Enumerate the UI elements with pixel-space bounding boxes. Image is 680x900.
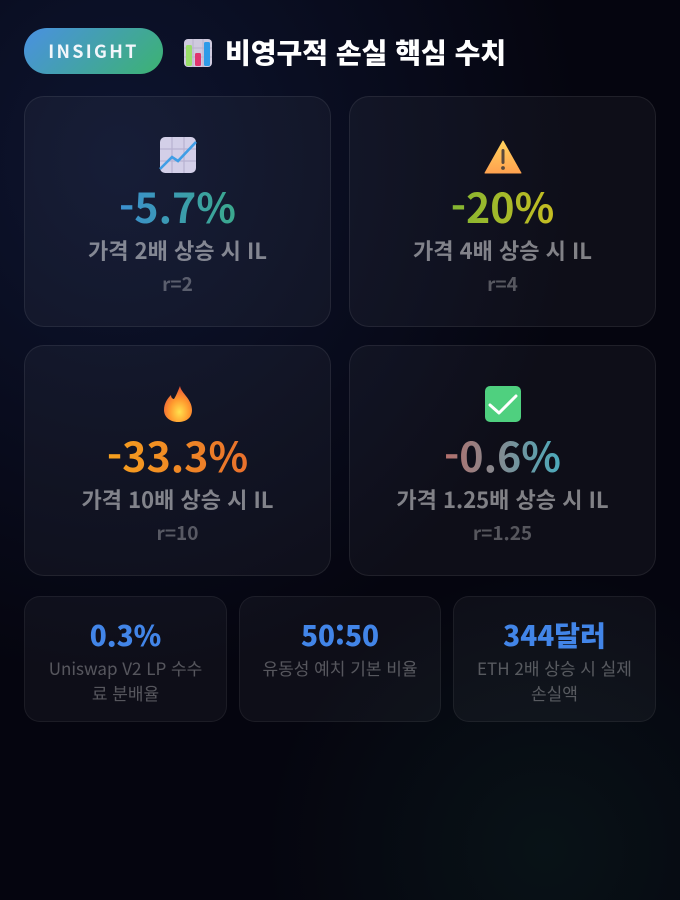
ratio: r=10: [157, 519, 198, 546]
label: 가격 1.25배 상승 시 IL: [396, 483, 609, 515]
stat: loss amount: [453, 596, 656, 722]
icon: chart increasing: [159, 137, 197, 173]
badge: INSIGHT: [24, 28, 163, 74]
stat label: 유동성 예치 기본 비율: [262, 655, 418, 680]
value: -20%: [451, 175, 554, 235]
ratio: r=1.25: [473, 519, 532, 546]
icon: fire: [164, 386, 192, 422]
stat: fee share: [24, 596, 227, 722]
stat label: Uniswap V2 LP 수수료 분배율: [49, 655, 202, 705]
icon: check mark: [485, 386, 521, 422]
icon: warning: [484, 140, 522, 174]
panel: r=2: [24, 96, 331, 327]
value: -0.6%: [444, 424, 561, 484]
stat label: ETH 2배 상승 시 실제 손실액: [477, 655, 632, 705]
label: 가격 4배 상승 시 IL: [413, 234, 592, 266]
panel: r=1.25: [349, 345, 656, 576]
ratio: r=2: [162, 270, 193, 297]
label: 가격 10배 상승 시 IL: [81, 483, 274, 515]
ratio: r=4: [487, 270, 518, 297]
badge: INSIGHT: INSIGHT: [48, 38, 139, 64]
panel: r=10: [24, 345, 331, 576]
label: 가격 2배 상승 시 IL: [88, 234, 267, 266]
icon: bar chart: [184, 39, 212, 67]
panel: r=4: [349, 96, 656, 327]
value: -33.3%: [107, 424, 248, 484]
title: 비영구적 손실 핵심 수치: [225, 32, 506, 72]
stat value: 50:50: [301, 615, 379, 655]
stat: deposit ratio: [239, 596, 441, 722]
stat value: 344달러: [503, 615, 606, 655]
value: -5.7%: [119, 175, 236, 235]
stat value: 0.3%: [90, 615, 161, 655]
